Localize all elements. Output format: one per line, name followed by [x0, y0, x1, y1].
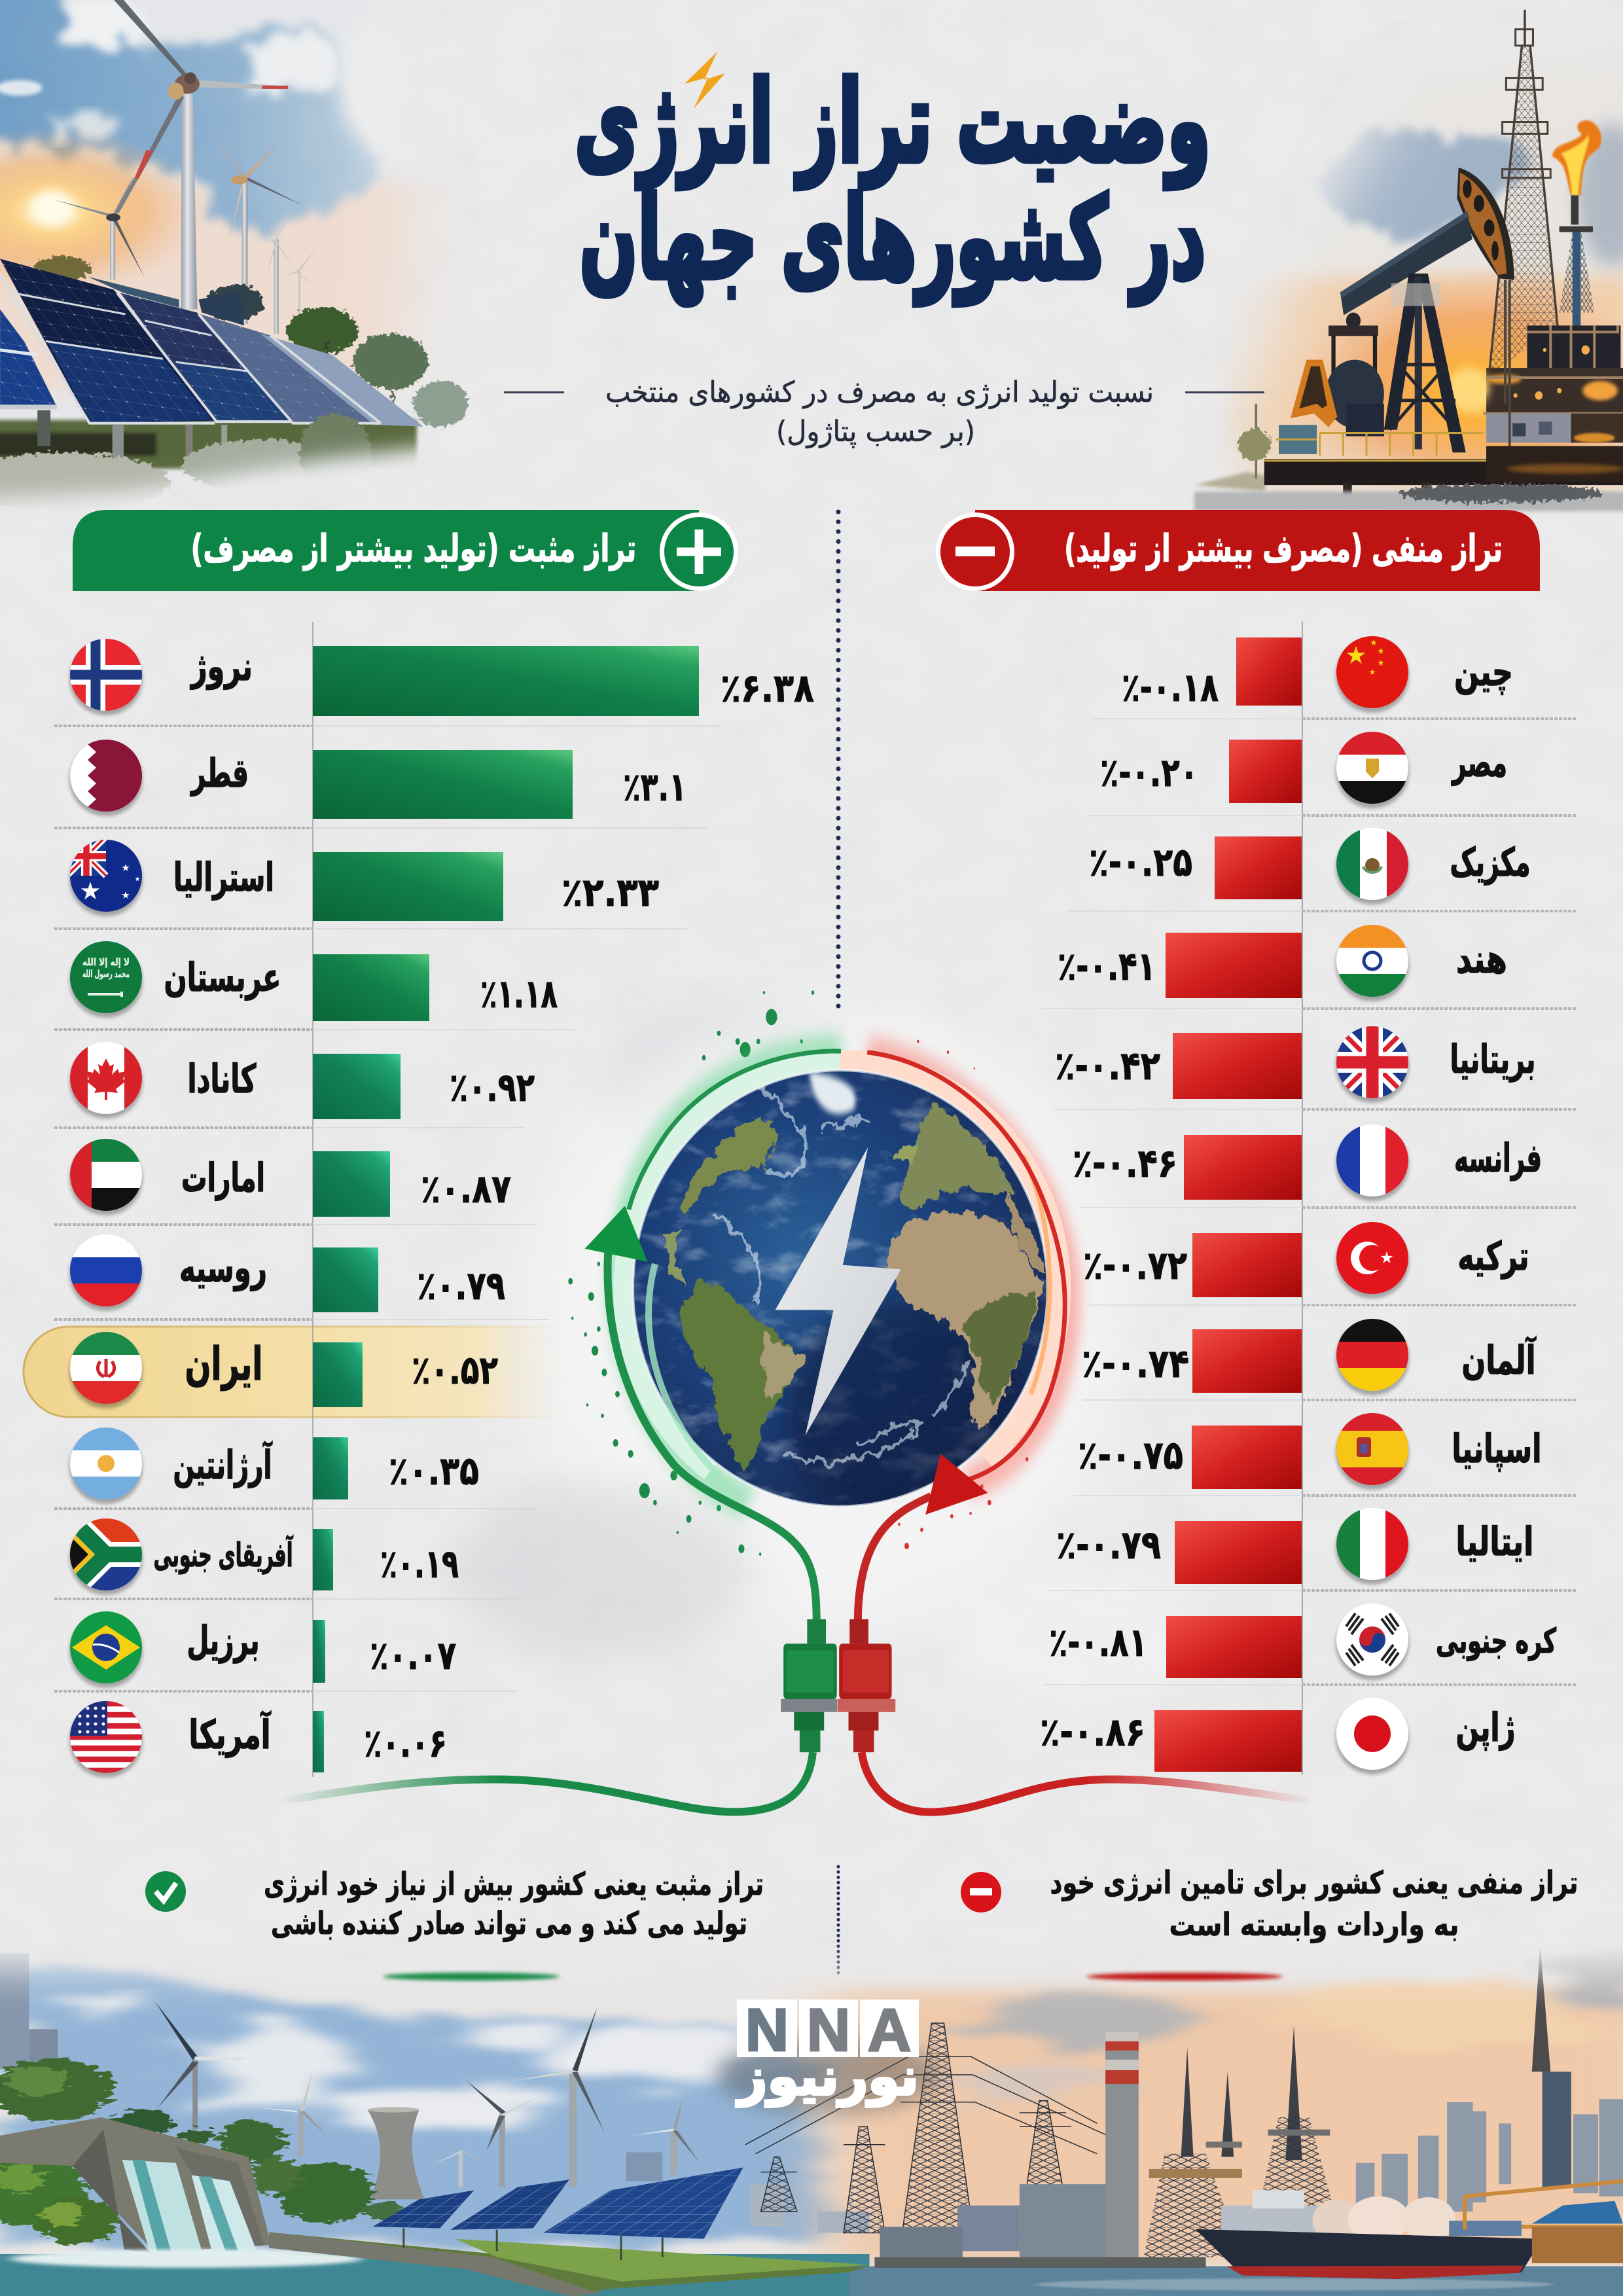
panel heading: negative balance — [936, 510, 1540, 591]
photo: oil pump jack and flare derrick — [1165, 0, 1623, 524]
flag: Russia — [67, 1231, 145, 1311]
note: negative balance — [961, 1865, 1578, 1981]
bar: Spain — [1192, 1426, 1302, 1489]
panel: positive balance chart — [24, 622, 814, 1778]
pylons — [760, 2023, 1071, 2245]
row: Brazil — [67, 1608, 456, 1688]
value: Australia: ٪۲.۳۳ — [562, 870, 659, 916]
icon: plus circle — [660, 512, 738, 591]
flag: Brazil — [67, 1608, 145, 1688]
flag: Turkey — [1333, 1219, 1412, 1299]
flag: Saudi Arabia: محمد رسول الله — [82, 968, 130, 980]
logo: NNA: نورنیوز — [736, 2048, 919, 2107]
bar: India — [1166, 933, 1302, 998]
name: Australia: استرالیا — [173, 855, 274, 901]
splatter — [568, 990, 814, 1556]
bar: Italy — [1175, 1521, 1302, 1584]
row: Canada — [67, 1039, 535, 1119]
photo: bottom energy landscape — [0, 1941, 1623, 2296]
flag: Mexico — [1333, 825, 1412, 905]
flag: Italy — [1333, 1505, 1412, 1585]
highlight band: Iran — [24, 1327, 563, 1417]
green ring cable — [629, 1051, 841, 1210]
value: UAE: ٪۰.۸۷ — [421, 1166, 511, 1212]
name: Canada: کانادا — [187, 1056, 257, 1102]
embankment and grass — [269, 2233, 870, 2296]
flag: United Kingdom — [1333, 1023, 1412, 1103]
subtitle: نسبت تولید انرژی به مصرف در کشورهای منتخب — [605, 376, 1154, 409]
row: Japan — [1040, 1695, 1516, 1774]
name: Spain: اسپانیا — [1452, 1426, 1542, 1472]
far left buildings — [0, 1953, 29, 2069]
clouds — [711, 1085, 967, 1462]
panel heading: positive balance — [73, 510, 738, 591]
note text positive — [264, 1866, 764, 1942]
row: Australia — [67, 836, 659, 921]
flag: Iran — [67, 1329, 145, 1408]
logo: NNA: N — [745, 1997, 789, 2064]
deck — [1264, 459, 1623, 485]
bar: Mexico — [1215, 836, 1302, 899]
photo: wind turbines and solar panels — [0, 0, 470, 508]
name: South Korea: کره جنوبی — [1436, 1622, 1557, 1661]
value: France: ٪-۰.۴۶ — [1073, 1141, 1177, 1187]
bar: Canada — [313, 1054, 401, 1119]
bar: Iran — [313, 1342, 363, 1407]
derrick — [1489, 46, 1558, 374]
name: Norway: نروژ — [190, 644, 253, 690]
bar: Brazil — [313, 1620, 325, 1683]
value: Brazil: ٪۰.۰۷ — [370, 1633, 456, 1679]
value: Spain: ٪-۰.۷۵ — [1078, 1433, 1183, 1479]
name: Mexico: مکزیک — [1450, 840, 1530, 886]
note: positive balance — [145, 1866, 764, 1981]
bar: Turkey — [1192, 1233, 1302, 1297]
name: Saudi Arabia: عربستان — [164, 955, 281, 1001]
grass mist — [0, 414, 371, 511]
note text positive: تولید می کند و می تواند صادر کننده باشی — [271, 1905, 747, 1942]
rig structure — [1486, 368, 1623, 414]
skyline right — [1356, 2099, 1623, 2212]
row: Norway — [67, 636, 814, 716]
heading text positive: تراز مثبت (تولید بیشتر از مصرف) — [191, 526, 636, 571]
note text positive: تراز مثبت یعنی کشور بیش از نیاز خود انرژی — [264, 1866, 764, 1903]
row: Germany — [1082, 1316, 1537, 1395]
refinery — [874, 2026, 1335, 2268]
row: Egypt — [1100, 728, 1507, 808]
ground — [0, 420, 417, 469]
name: United Kingdom: بریتانیا — [1450, 1037, 1535, 1083]
bar: Japan — [1154, 1710, 1302, 1772]
Africa — [886, 1212, 1040, 1427]
water — [1194, 492, 1623, 511]
accent line green — [383, 1973, 560, 1981]
flag: South Africa — [67, 1515, 145, 1595]
bar: Germany — [1192, 1329, 1302, 1393]
icon: title lightning bolt — [685, 52, 725, 109]
value: Turkey: ٪-۰.۷۲ — [1083, 1243, 1187, 1289]
plug: red — [838, 1619, 895, 1752]
name: Argentina: آرژانتین — [173, 1441, 272, 1488]
row: South Korea — [1049, 1600, 1557, 1680]
value: Japan: ٪-۰.۸۶ — [1040, 1710, 1145, 1755]
value: India: ٪-۰.۴۱ — [1058, 944, 1156, 990]
row: Spain — [1078, 1410, 1542, 1490]
row: France — [1073, 1121, 1542, 1201]
value: South Korea: ٪-۰.۸۱ — [1049, 1620, 1147, 1666]
bar: France — [1184, 1135, 1302, 1200]
main panels — [0, 259, 215, 423]
red ring cable — [867, 1052, 1065, 1480]
row: Italy — [1056, 1505, 1534, 1585]
row: Russia — [67, 1231, 505, 1312]
row: United Kingdom — [1055, 1023, 1535, 1103]
flag: Australia — [67, 836, 145, 916]
South America — [679, 1283, 805, 1473]
bar: South Africa — [313, 1529, 333, 1590]
subtitle: (بر حسب پتاژول) — [776, 415, 975, 448]
logo: NNA: A — [868, 1997, 911, 2064]
North America — [681, 1119, 776, 1215]
flag: USA — [67, 1698, 145, 1778]
bar: South Korea — [1166, 1616, 1302, 1678]
bar: Saudi Arabia — [313, 954, 429, 1021]
waterfalls — [122, 2160, 202, 2253]
subtitle — [504, 376, 1264, 448]
flag: Norway — [67, 636, 145, 715]
bar: Argentina — [313, 1437, 348, 1499]
bar: United Kingdom — [1173, 1033, 1302, 1099]
bar: Russia — [313, 1247, 378, 1312]
icon: minus circle — [936, 512, 1014, 591]
flag: Spain — [1333, 1410, 1412, 1490]
note text negative: به واردات وابسته است — [1169, 1907, 1459, 1943]
far turbines — [260, 208, 318, 334]
flag: China — [1333, 633, 1412, 713]
value: Canada: ٪۰.۹۲ — [450, 1065, 535, 1111]
flag: UAE — [67, 1136, 145, 1215]
name: Italy: ایتالیا — [1455, 1519, 1534, 1565]
flag: South Korea — [1333, 1600, 1412, 1680]
name: Egypt: مصر — [1451, 740, 1507, 786]
icon: minus — [961, 1872, 1001, 1912]
value: Saudi Arabia: ٪۱.۱۸ — [480, 971, 558, 1017]
title line 2: در کشورهای جهان — [580, 173, 1205, 305]
value: United Kingdom: ٪-۰.۴۲ — [1055, 1043, 1160, 1089]
icon: check — [145, 1871, 186, 1912]
flag: Qatar — [67, 736, 145, 816]
row: Mexico — [1089, 825, 1530, 905]
logo: NNA: N — [807, 1997, 850, 2064]
bar: Norway — [313, 646, 699, 716]
cooling tower — [367, 2108, 424, 2199]
row: USA — [67, 1698, 447, 1778]
value: Iran: ٪۰.۵۲ — [412, 1348, 498, 1393]
name: Japan: ژاپن — [1455, 1705, 1516, 1751]
flag: Germany — [1333, 1316, 1412, 1395]
name: France: فرانسه — [1454, 1136, 1542, 1181]
pump jack — [1457, 168, 1514, 280]
name: UAE: امارات — [181, 1155, 265, 1201]
name: Iran: ایران — [185, 1337, 263, 1391]
name: Turkey: ترکیه — [1458, 1234, 1529, 1280]
supports — [113, 425, 124, 464]
title line 1: وضعیت تراز انرژی — [575, 56, 1211, 189]
name: Germany: آلمان — [1462, 1336, 1537, 1384]
row: Argentina — [67, 1424, 479, 1504]
bar: UAE — [313, 1151, 390, 1217]
trees behind — [34, 255, 469, 427]
name: Brazil: برزیل — [187, 1618, 259, 1664]
row: UAE — [67, 1136, 511, 1217]
inner light band — [625, 1062, 840, 1470]
trees left — [0, 2058, 406, 2245]
row: India — [1058, 922, 1507, 1001]
note text negative — [1050, 1865, 1578, 1943]
ocean cloud texture — [633, 1070, 1048, 1507]
flag: France — [1333, 1121, 1412, 1201]
distant shore — [1194, 472, 1267, 492]
centerpiece: globe with cables — [279, 990, 1312, 1812]
value: Argentina: ٪۰.۳۵ — [389, 1448, 479, 1494]
flare — [1552, 120, 1601, 195]
name: China: چین — [1454, 649, 1513, 695]
bar: Australia — [313, 852, 503, 921]
value: Italy: ٪-۰.۷۹ — [1056, 1522, 1161, 1568]
solar array — [372, 2168, 743, 2260]
value: USA: ٪۰.۰۶ — [364, 1721, 447, 1767]
hydro dam — [0, 2117, 271, 2253]
value: Qatar: ٪۳.۱ — [623, 764, 687, 810]
row: Iran — [67, 1329, 498, 1408]
row: Turkey — [1083, 1219, 1529, 1299]
flag: Argentina — [67, 1424, 145, 1504]
value: Germany: ٪-۰.۷۴ — [1082, 1341, 1189, 1387]
panel: negative balance chart — [1040, 622, 1577, 1775]
icon: red arrow — [925, 1454, 988, 1515]
row: Saudi Arabia — [67, 938, 558, 1021]
water — [0, 2254, 870, 2296]
bar: Qatar — [313, 750, 573, 819]
globe sphere — [633, 1070, 1048, 1507]
plug: green — [781, 1619, 837, 1752]
value: Mexico: ٪-۰.۲۵ — [1089, 840, 1192, 886]
value: Russia: ٪۰.۷۹ — [417, 1263, 505, 1309]
accent line red — [1086, 1973, 1283, 1981]
right industry — [1465, 2181, 1623, 2230]
name: India: هند — [1456, 937, 1507, 982]
value: Egypt: ٪-۰.۲۰ — [1100, 750, 1198, 796]
Europe and Arabia — [901, 1104, 1014, 1210]
bar: Egypt — [1229, 740, 1302, 803]
turbines — [155, 2002, 700, 2187]
glow — [623, 1051, 841, 1503]
lightning bolt — [776, 1147, 901, 1435]
name: USA: آمریکا — [188, 1710, 272, 1758]
logo: NNA — [717, 1997, 939, 2114]
flag: Saudi Arabia — [67, 938, 145, 1018]
flag: Canada — [67, 1039, 145, 1119]
bar: China — [1236, 637, 1302, 706]
flag: Saudi Arabia: لا إله إلا الله — [82, 956, 130, 968]
value: South Africa: ٪۰.۱۹ — [380, 1541, 459, 1587]
back left panel — [0, 310, 57, 407]
flag: Japan — [1333, 1695, 1412, 1774]
lower cables — [279, 1752, 813, 1812]
name: South Africa: آفریقای جنوبی — [153, 1535, 294, 1575]
title with lightning bolt — [575, 52, 1211, 305]
name: Russia: روسیه — [179, 1246, 267, 1291]
rim — [633, 1070, 1048, 1507]
flag: India — [1333, 922, 1412, 1001]
LNG ship — [1196, 2190, 1543, 2279]
row: Qatar — [67, 736, 687, 819]
value: Norway: ٪۶.۳۸ — [721, 666, 814, 711]
flag: Egypt — [1333, 728, 1412, 808]
row: South Africa — [67, 1515, 459, 1595]
value: China: ٪-۰.۱۸ — [1122, 665, 1219, 711]
bar: USA — [313, 1711, 324, 1772]
row: China — [1122, 633, 1513, 713]
name: Qatar: قطر — [190, 751, 249, 797]
icon: green arrow — [585, 1206, 647, 1262]
